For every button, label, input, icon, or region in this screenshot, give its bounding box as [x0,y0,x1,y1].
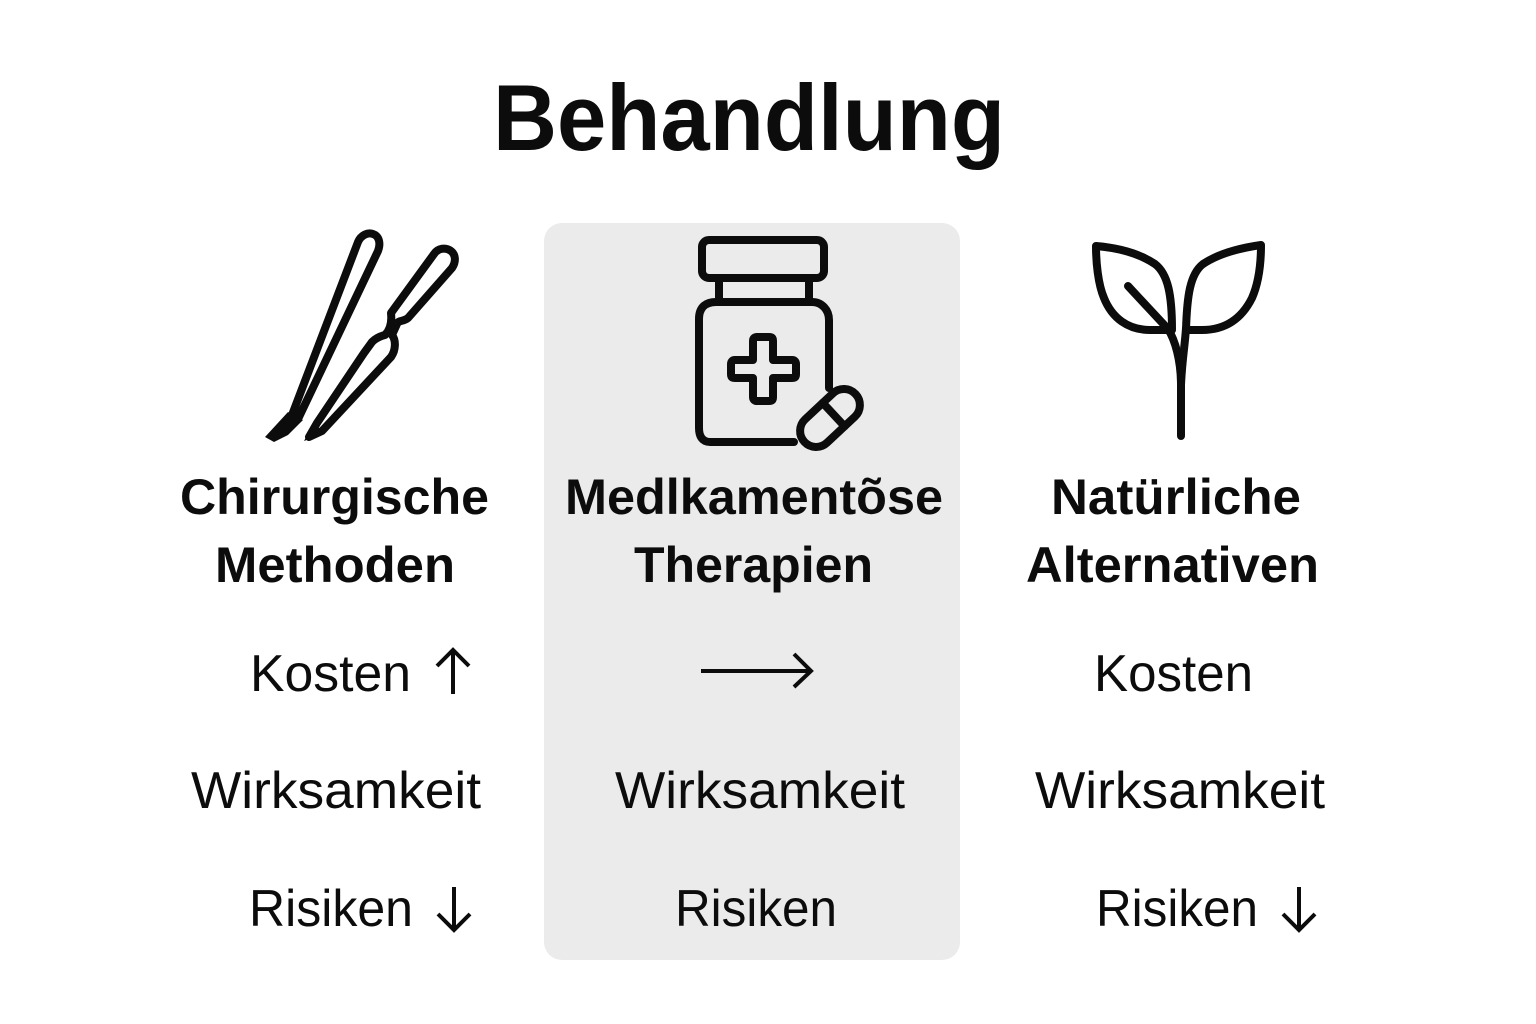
text: Kosten: Kosten [1094,645,1253,703]
text: Wirksamkeit: Wirksamkeit [191,762,482,820]
icon: medicine bottle with pill [699,240,867,454]
column: drug therapies [565,240,943,938]
panel: highlighted middle column background [544,223,960,960]
text: Risiken: Risiken [249,880,413,938]
heading: natural alternatives: Natürliche [1051,469,1301,525]
column: natural alternatives [1026,245,1326,938]
heading: surgical methods: Chirurgische [180,469,489,525]
arrow: down [1283,887,1315,930]
heading: natural alternatives: Alternativen [1026,537,1319,593]
arrow: right [701,654,811,687]
heading: drug therapies: Medlkamentõse [565,469,943,525]
heading: surgical methods: Methoden [215,537,455,593]
text: Wirksamkeit: Wirksamkeit [615,762,906,820]
icon: plant sprout [1096,245,1261,436]
text: Wirksamkeit: Wirksamkeit [1035,762,1326,820]
title: Behandlung [493,65,1005,170]
text: Risiken: Risiken [1096,880,1258,938]
arrow: down [438,887,470,930]
icon: scalpels [265,233,455,442]
heading: drug therapies: Therapien [634,537,873,593]
text: Risiken: Risiken [675,880,837,938]
heading: natural alternatives [1026,469,1319,593]
heading: surgical methods [180,469,489,593]
text: Kosten: Kosten [250,645,411,703]
heading: drug therapies [565,469,943,593]
column: surgical methods [180,233,489,938]
arrow: up [437,650,469,694]
